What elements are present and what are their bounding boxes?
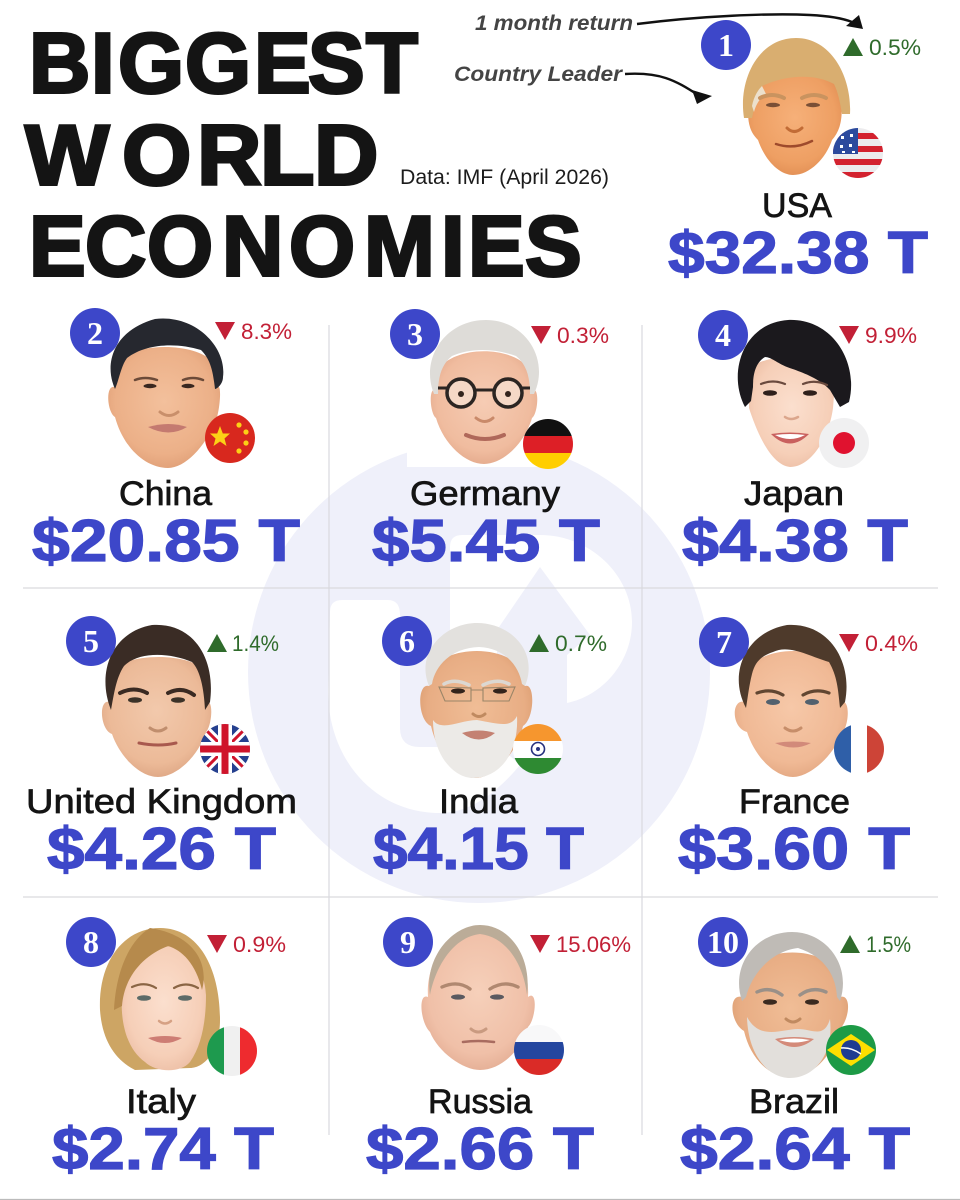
country: Brazil <box>749 1083 839 1121</box>
rank badge <box>390 309 440 359</box>
1 month change: 0.5% <box>869 35 921 60</box>
rank badge: 4 <box>715 317 731 353</box>
rank badge: 9 <box>400 924 416 960</box>
flag: Germany <box>523 419 573 469</box>
rank badge <box>698 917 748 967</box>
flag: Brazil <box>826 1025 876 1075</box>
flag: China <box>205 413 255 463</box>
card: USA <box>668 20 928 286</box>
gdp value: $20.85 T <box>32 508 300 574</box>
1 month change <box>207 932 286 957</box>
rank badge <box>698 310 748 360</box>
1 month change: 15.06% <box>556 932 631 957</box>
flag: Japan <box>819 418 869 468</box>
1 month change: 1.4% <box>232 631 279 656</box>
title <box>25 16 582 294</box>
leader portrait: United Kingdom <box>102 625 211 777</box>
country: Germany <box>410 475 560 513</box>
rank badge <box>66 616 116 666</box>
1 month change <box>840 932 911 957</box>
rank badge <box>383 917 433 967</box>
card: India <box>373 616 607 882</box>
title: WORLD <box>25 108 378 203</box>
rank badge <box>382 616 432 666</box>
rank badge: 6 <box>399 623 415 659</box>
1 month change <box>843 35 921 60</box>
country: Japan <box>744 475 844 513</box>
rank badge: 3 <box>407 316 423 352</box>
country: France <box>739 783 850 821</box>
country: USA <box>762 187 832 225</box>
data source note: Data: IMF (April 2026) <box>400 166 609 189</box>
1 month change: 0.7% <box>555 631 607 656</box>
country: Russia <box>428 1083 532 1121</box>
title: BIGGEST <box>29 16 418 112</box>
leader portrait: India <box>420 623 532 778</box>
leader portrait: Germany <box>430 320 539 464</box>
gdp value: $4.38 T <box>682 508 908 574</box>
1 month change: 1.5% <box>866 932 911 957</box>
legend: 1 month return <box>475 12 863 35</box>
gdp value: $32.38 T <box>668 220 928 286</box>
rank badge: 8 <box>83 924 99 960</box>
rank badge <box>66 917 116 967</box>
gdp value: $4.15 T <box>373 816 584 882</box>
card: France <box>678 617 918 882</box>
card: Italy <box>52 917 286 1182</box>
card: United Kingdom <box>26 616 297 882</box>
country: United Kingdom <box>26 783 297 821</box>
rank badge <box>70 308 120 358</box>
1 month change: 0.9% <box>233 932 286 957</box>
1 month change: 0.4% <box>865 631 918 656</box>
card: Germany <box>372 309 609 574</box>
watermark logo <box>248 440 710 903</box>
flag: France <box>834 724 884 774</box>
rank badge <box>699 617 749 667</box>
card: Japan <box>682 310 917 574</box>
legend: country leader: Country Leader <box>454 63 624 86</box>
leader portrait: China <box>108 318 223 468</box>
flag: Italy <box>207 1026 257 1076</box>
gdp value: $2.64 T <box>680 1116 910 1182</box>
flag: United Kingdom <box>200 724 250 774</box>
1 month change <box>531 323 609 348</box>
country: Italy <box>126 1083 196 1121</box>
leader portrait: USA <box>743 38 850 175</box>
gdp value: $4.26 T <box>47 816 276 882</box>
rank badge: 2 <box>87 315 103 351</box>
1 month change <box>215 319 292 344</box>
leader portrait: France <box>735 625 848 777</box>
legend: 1 month return: 1 month return <box>475 12 633 35</box>
flag: USA <box>833 128 883 178</box>
gdp value: $3.60 T <box>678 816 910 882</box>
gdp value: $2.66 T <box>366 1116 594 1182</box>
flag: India <box>513 724 563 774</box>
leader portrait: Russia <box>421 925 535 1070</box>
grid lines <box>0 325 960 1200</box>
card: Brazil <box>680 917 911 1182</box>
1 month change: 9.9% <box>865 323 917 348</box>
rank badge <box>701 20 751 70</box>
1 month change: 8.3% <box>241 319 292 344</box>
card: Russia <box>366 917 631 1182</box>
rank badge: 5 <box>83 623 99 659</box>
flag: Russia <box>514 1025 564 1075</box>
1 month change: 0.3% <box>557 323 609 348</box>
country: China <box>119 475 212 513</box>
leader portrait: Italy <box>100 928 220 1070</box>
leader portrait: Japan <box>738 320 851 467</box>
legend: country leader <box>454 63 712 104</box>
1 month change <box>207 631 279 656</box>
gdp value: $5.45 T <box>372 508 600 574</box>
title: ECONOMIES <box>29 200 582 294</box>
gdp value: $2.74 T <box>52 1116 274 1182</box>
1 month change <box>839 323 917 348</box>
leader portrait: Brazil <box>732 932 848 1078</box>
rank badge: 10 <box>707 924 739 960</box>
rank badge: 1 <box>718 27 734 63</box>
1 month change <box>529 631 607 656</box>
rank badge: 7 <box>716 624 732 660</box>
card: China <box>32 308 300 574</box>
1 month change <box>839 631 918 656</box>
country: India <box>439 783 518 821</box>
